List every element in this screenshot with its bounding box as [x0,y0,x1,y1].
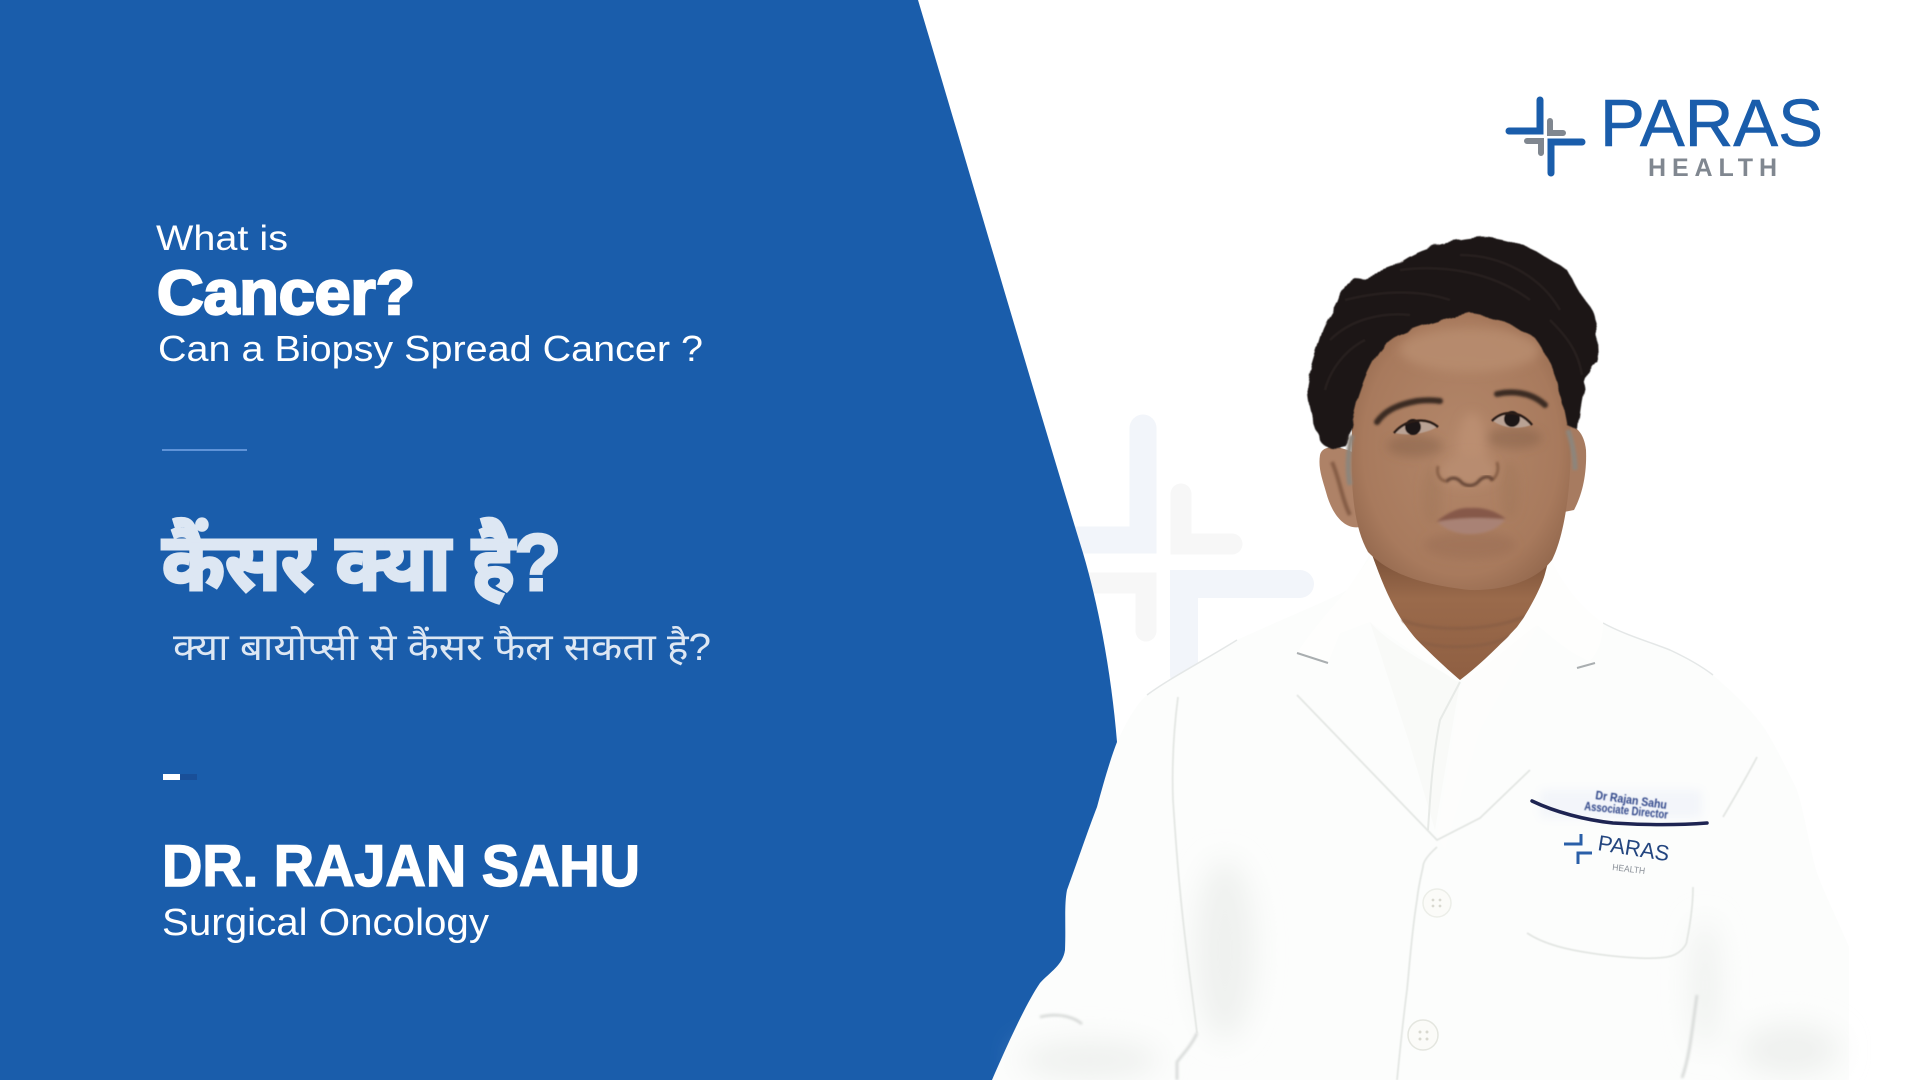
face [1352,305,1571,590]
logo wordmark: PARAS [1600,86,1823,161]
badge background [1540,790,1702,818]
doctor specialty: Surgical Oncology [162,902,489,944]
doctor portrait [992,237,1849,1080]
icon: logo cross [1509,100,1582,173]
face shading [1387,328,1542,559]
coat buttons [1408,889,1451,1050]
sleeve folds [1040,995,1697,1080]
heading: what is: What is [156,219,288,258]
subheading: biopsy question: Can a Biopsy Spread Cancer ? [158,328,703,369]
logo subtitle: HEALTH [1648,154,1777,182]
logo: Paras Health [1509,86,1823,182]
divider line [162,449,247,451]
coat lapel and front lines [1173,695,1757,1080]
hair [1307,237,1598,485]
coat outline [1147,623,1713,695]
hindi heading: कैंसर क्या है? [162,517,561,607]
hindi subheading: क्या बायोप्सी से कैंसर फैल सकता है? [173,625,711,669]
badge logo subtitle: HEALTH [1612,862,1646,876]
eyes [1394,411,1532,435]
neck creases [1402,616,1526,647]
doctor name: DR. RAJAN SAHU [162,834,640,899]
hair strands [1325,255,1582,390]
badge stitched line [1532,801,1707,824]
ears [1319,425,1586,527]
badge logo wordmark: PARAS [1596,830,1671,866]
eyebrows [1377,392,1545,422]
accent dash [163,774,197,780]
badge title: Associate Director [1584,799,1669,822]
coat soft shadows [1020,860,1840,1080]
nose [1437,455,1498,486]
neck [1372,555,1550,680]
badge name: Dr Rajan Sahu [1595,788,1668,812]
blue panel [0,0,1117,1080]
heading: cancer: Cancer? [157,259,415,328]
mouth [1436,508,1506,534]
coat badge [1532,788,1707,876]
gray temples [1348,430,1575,485]
badge logo cross [1564,834,1592,864]
coat body [992,553,1849,1080]
shirt and collar [1297,555,1603,850]
watermark cross [1060,428,1300,675]
